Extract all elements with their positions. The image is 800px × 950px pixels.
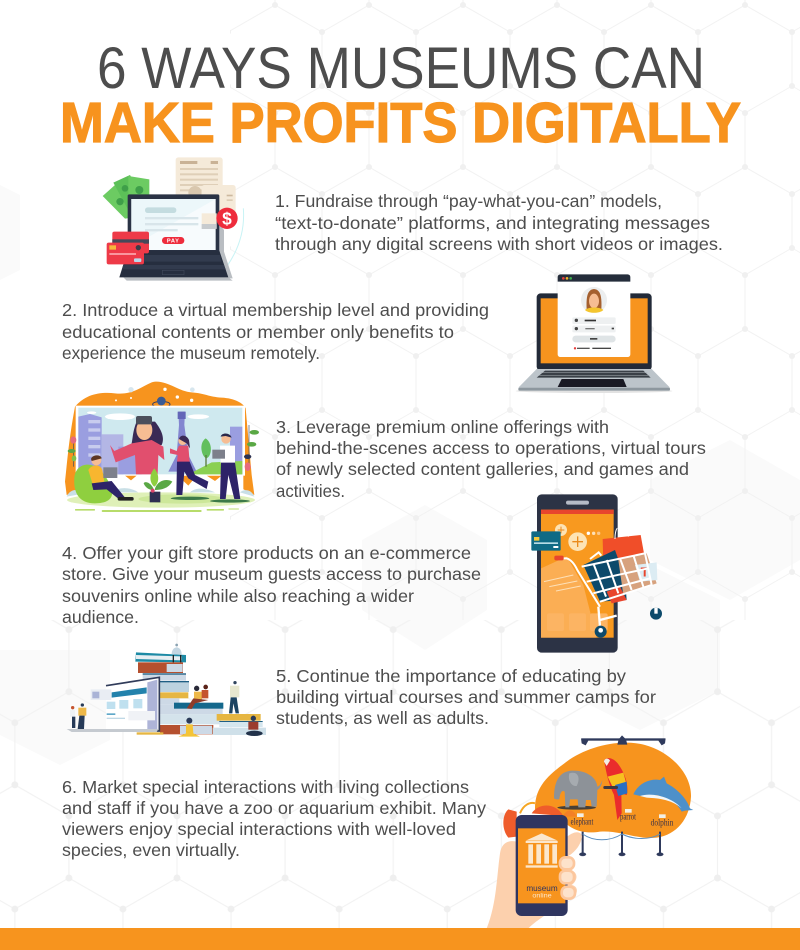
text block: way 6: 6. Market special interactions with living collections bbox=[62, 777, 469, 797]
shopping bags and cart bbox=[554, 528, 662, 638]
leaves bbox=[503, 803, 577, 838]
text block: way 4: audience. bbox=[62, 607, 139, 627]
exhibit labels: parrot bbox=[620, 812, 636, 822]
virtual screen bbox=[76, 406, 245, 476]
text block: way 1: through any digital screens with short videos or images. bbox=[275, 234, 723, 254]
title bbox=[60, 36, 741, 155]
parrot bbox=[603, 758, 627, 820]
text block: way 1: 1. Fundraise through “pay-what-you-can” models, bbox=[275, 191, 662, 211]
exhibit labels: elephant bbox=[571, 817, 594, 827]
readers on books bbox=[178, 681, 263, 737]
spotlight rail bbox=[581, 735, 666, 745]
lamp bbox=[172, 644, 182, 662]
running woman bbox=[170, 436, 209, 500]
phone bbox=[516, 815, 568, 916]
text block: way 3 bbox=[276, 417, 706, 501]
icon: museum online exhibit bbox=[487, 735, 693, 928]
text block: way 5 bbox=[276, 666, 656, 728]
phone: museum bbox=[526, 884, 558, 893]
exhibit labels: dolphin bbox=[651, 818, 674, 828]
icon: books and online courses bbox=[67, 644, 266, 737]
text block: way 6 bbox=[62, 777, 486, 860]
laptop screen bbox=[67, 677, 159, 732]
text block: way 2 bbox=[62, 300, 489, 363]
icon: laptop payment bbox=[103, 157, 244, 281]
icon: laptop with member login bbox=[516, 274, 672, 393]
text block: way 3: activities. bbox=[276, 481, 345, 501]
orange footer bar bbox=[0, 928, 800, 950]
potted plant bbox=[144, 468, 172, 502]
text block: way 6: species, even virtually. bbox=[62, 840, 240, 860]
shopping bags and cart: T bbox=[641, 565, 649, 580]
stack of books bbox=[135, 652, 266, 735]
text block: way 3: behind-the-scenes access to operations, virtual tours bbox=[276, 438, 706, 458]
icon: banknotes bbox=[103, 175, 149, 219]
text block: way 4: souvenirs online while also reaching a wider bbox=[62, 586, 414, 606]
phone bbox=[537, 494, 618, 653]
title: MAKE PROFITS DIGITALLY bbox=[60, 91, 741, 155]
elephant bbox=[554, 771, 602, 810]
title: 6 WAYS MUSEUMS CAN bbox=[97, 36, 705, 101]
rope barriers bbox=[579, 832, 663, 856]
text block: way 1 bbox=[275, 191, 723, 254]
text block: way 4 bbox=[62, 543, 481, 627]
icon: e-commerce phone with cart bbox=[531, 494, 662, 653]
side plants bbox=[68, 425, 259, 471]
orange exhibit blob bbox=[535, 743, 691, 838]
icon: dollar badge bbox=[216, 208, 238, 229]
VR woman bbox=[110, 416, 164, 474]
text block: way 1: “text-to-donate” platforms, and integrating messages bbox=[275, 213, 710, 233]
fingers bbox=[560, 857, 575, 899]
text block: way 5: students, as well as adults. bbox=[276, 708, 489, 728]
laptop bbox=[119, 194, 228, 277]
text block: way 2: 2. Introduce a virtual membership level and providing bbox=[62, 300, 489, 320]
icon: documents bbox=[176, 157, 236, 226]
phone: online bbox=[532, 892, 552, 899]
text block: way 3: of newly selected content galleries, and games and bbox=[276, 459, 689, 479]
hand bbox=[487, 832, 582, 928]
text block: way 5: 5. Continue the importance of educating by bbox=[276, 666, 626, 686]
icon: virtual reality scene bbox=[65, 382, 259, 512]
text block: way 2: educational contents or member only benefits to bbox=[62, 322, 454, 342]
man with laptop bbox=[210, 434, 250, 503]
dolphin bbox=[633, 777, 693, 812]
person on beanbag bbox=[74, 455, 134, 503]
text block: way 6: viewers enjoy special interactions with well-loved bbox=[62, 819, 456, 839]
exhibit labels bbox=[571, 809, 674, 828]
login window bbox=[558, 274, 630, 357]
icon: credit cards bbox=[107, 232, 149, 264]
laptop: PAY bbox=[167, 238, 180, 244]
text block: way 3: 3. Leverage premium online offerings with bbox=[276, 417, 609, 437]
text block: way 4: store. Give your museum guests access to purchase bbox=[62, 564, 481, 584]
credit card bbox=[531, 531, 561, 551]
people at laptop bbox=[70, 703, 86, 729]
text block: way 6: and staff if you have a zoo or aquarium exhibit. Many bbox=[62, 798, 486, 818]
text block: way 2: experience the museum remotely. bbox=[62, 343, 320, 363]
icon: dollar badge: $ bbox=[222, 209, 232, 229]
text block: way 5: building virtual courses and summer camps for bbox=[276, 687, 656, 707]
text block: way 4: 4. Offer your gift store products on an e-commerce bbox=[62, 543, 471, 563]
